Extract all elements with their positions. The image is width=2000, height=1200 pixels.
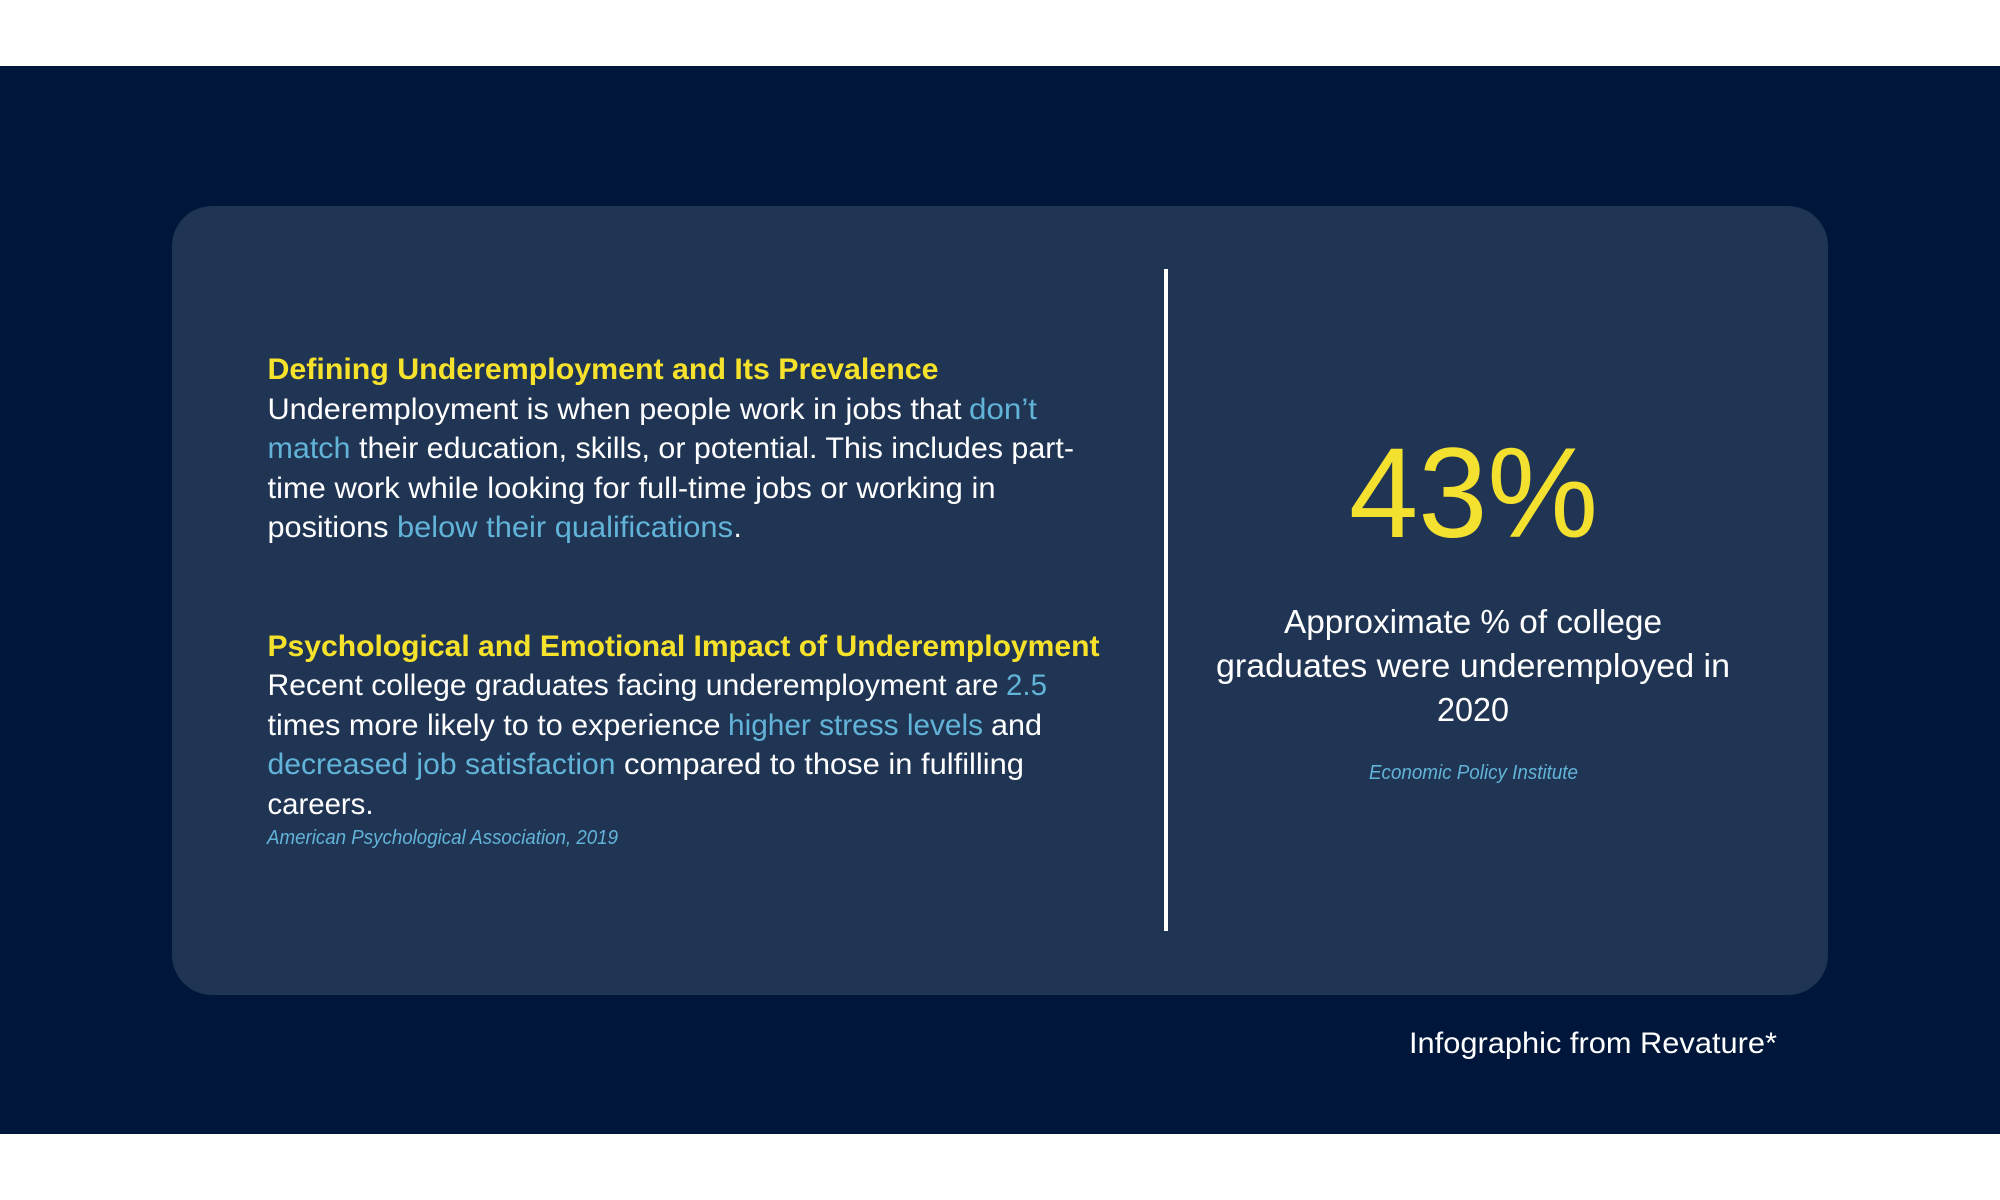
source: american psychological association: American Psychological Association, 2019 [266, 827, 618, 849]
source: economic policy institute: Economic Policy Institute [1369, 762, 1578, 784]
stat description: graduates were underemployed in [1216, 647, 1730, 684]
body text: definition: their education, skills, or potential. This includes part- [359, 432, 1074, 465]
body text: definition: Underemployment is when people work in jobs that [268, 393, 962, 426]
body text: impact: careers. [268, 788, 374, 821]
body text: impact: Recent college graduates facing underemployment are [268, 669, 998, 702]
body text: definition [268, 393, 1074, 544]
body text: definition: don’t [969, 393, 1038, 426]
stat description: 2020 [1437, 691, 1509, 728]
body text: definition: below their qualifications [397, 511, 733, 544]
body text: impact: compared to those in fulfilling [624, 748, 1024, 781]
stat description: Approximate % of college [1284, 603, 1662, 640]
body text: impact: decreased job satisfaction [268, 748, 616, 781]
statistic: 43%: 43% [1349, 422, 1598, 565]
panel: main card [172, 206, 1828, 995]
heading: defining underemployment: Defining Underemployment and Its Prevalence [268, 353, 938, 386]
text block: defining underemployment [268, 353, 1074, 544]
heading: psychological impact: Psychological and Emotional Impact of Underemployment [268, 630, 1100, 663]
body text: impact: higher stress levels [728, 709, 983, 742]
footer credit: Infographic from Revature* [1409, 1027, 1777, 1060]
body text: definition: match [268, 432, 350, 465]
body text: definition: positions [268, 511, 388, 544]
body text: impact: 2.5 [1006, 669, 1047, 702]
body text: definition: . [734, 511, 742, 544]
body text: impact: times more likely to to experience [268, 709, 720, 742]
body text: definition: time work while looking for full-time jobs or working in [268, 472, 996, 505]
body text: impact: and [991, 709, 1042, 742]
body text: impact [268, 669, 1047, 821]
vertical divider [1164, 269, 1168, 931]
stat description [1216, 603, 1730, 728]
text block: psychological impact [266, 630, 1100, 849]
